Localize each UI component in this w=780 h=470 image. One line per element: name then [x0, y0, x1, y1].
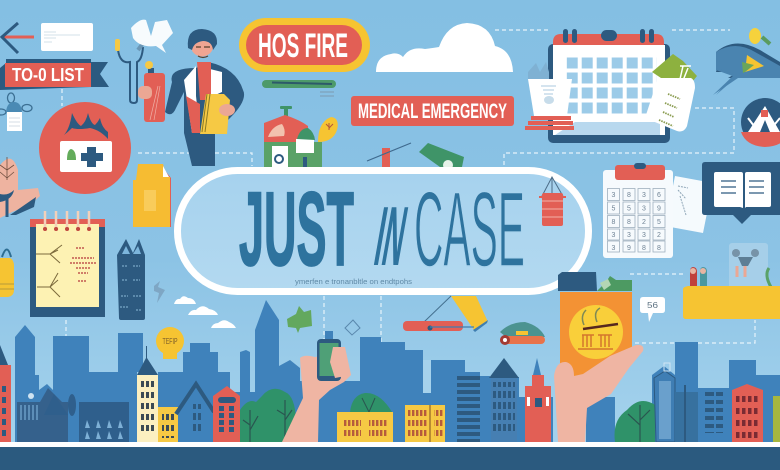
yellow low building with tree	[337, 393, 393, 442]
small calendar clipboard: 8	[612, 219, 616, 226]
icon: yellow bulb: TEFIP	[162, 337, 178, 346]
main title pill: IN	[369, 189, 413, 283]
dashed connector lines	[62, 30, 755, 412]
green cart	[419, 143, 464, 170]
orange card with hand	[554, 272, 643, 442]
icon: red lantern	[539, 177, 566, 226]
note card	[41, 23, 93, 51]
ticket tag	[645, 54, 697, 131]
small calendar clipboard: 3	[642, 192, 646, 199]
book speech bubble	[702, 162, 780, 224]
badge: hos fire	[239, 18, 370, 72]
notepad with sketch	[30, 211, 105, 317]
icon: fire medical circle	[39, 102, 131, 194]
olive building	[773, 396, 780, 442]
small calendar clipboard: 9	[657, 206, 661, 212]
plant pot	[525, 62, 574, 130]
red house	[213, 386, 240, 442]
cityscape skyline	[0, 300, 780, 442]
icon: house	[264, 106, 338, 167]
small calendar clipboard: 2	[642, 219, 646, 226]
small calendar clipboard: 5	[627, 206, 631, 212]
small calendar clipboard: 5	[612, 206, 616, 212]
person with folder	[165, 29, 244, 166]
red post and line	[367, 143, 411, 168]
small calendar clipboard: 8	[627, 192, 631, 199]
back buildings	[15, 300, 780, 442]
small calendar clipboard: 3	[612, 245, 616, 252]
cream tower	[137, 346, 158, 442]
banner: to-do list	[0, 59, 109, 90]
dark striped tower	[457, 375, 480, 442]
striped office right	[698, 388, 731, 442]
small calendar clipboard: 3	[612, 232, 616, 239]
bird icon	[713, 28, 780, 95]
yellow shelf with figures	[683, 243, 780, 319]
small calendar clipboard: 6	[657, 192, 661, 199]
small calendar clipboard: 9	[627, 245, 631, 252]
small calendar clipboard: 3	[642, 232, 646, 239]
antenna shape	[345, 320, 360, 335]
arrow top left	[2, 23, 34, 53]
striped tower right	[654, 363, 675, 442]
navy roof tower	[489, 358, 519, 442]
small calendar clipboard: 3	[627, 232, 631, 239]
label: medical emergency: MEDICAL EMERGENCY	[358, 100, 507, 123]
small calendar clipboard	[603, 163, 673, 258]
main title pill	[178, 169, 588, 292]
dark low buildings	[17, 388, 129, 442]
red clock tower	[525, 358, 551, 442]
dark tower	[117, 239, 145, 320]
tree right	[614, 401, 655, 442]
icon: yellow bulb	[156, 327, 184, 359]
lightning bolt	[154, 281, 165, 303]
white shield icon	[131, 20, 173, 53]
yellow office block	[405, 405, 445, 442]
icon circle: figure	[741, 98, 780, 147]
icon: mask and clipboard	[0, 93, 32, 131]
icon: yellow cylinder	[0, 250, 14, 297]
small clouds	[174, 296, 236, 328]
green trees left	[240, 389, 296, 442]
main title pill: CASE	[414, 169, 525, 289]
paper behind calendar	[665, 176, 713, 233]
cloud	[376, 23, 513, 72]
small calendar clipboard: 8	[627, 219, 631, 226]
speech bubble 56	[640, 297, 665, 322]
icon: pink hand	[0, 157, 40, 218]
stethoscope	[115, 39, 144, 103]
main title pill: JUST	[239, 171, 354, 288]
small calendar clipboard: 3	[642, 206, 646, 212]
red office right	[732, 384, 763, 442]
small calendar clipboard: 2	[657, 232, 661, 239]
green leaf	[287, 306, 312, 333]
footer band	[0, 447, 780, 470]
icon: red extinguisher	[138, 61, 165, 122]
label: medical emergency	[351, 96, 514, 126]
hand holding phone	[282, 339, 351, 442]
crane object	[403, 296, 488, 332]
small calendar clipboard: 5	[657, 219, 661, 226]
calendar large	[548, 29, 670, 143]
small calendar clipboard: 8	[657, 245, 661, 252]
lamp building	[675, 385, 698, 442]
green bar	[262, 80, 336, 96]
hand holding card	[554, 345, 643, 442]
badge: hos fire: HOS FIRE	[258, 27, 348, 65]
banner: to-do list: TO-0 LIST	[12, 65, 84, 85]
small vehicle	[500, 322, 545, 345]
blue house	[176, 384, 214, 442]
ground stripe	[0, 442, 780, 447]
red building left	[0, 345, 11, 442]
small calendar clipboard: 8	[642, 245, 646, 252]
subtitle: ymerfen e tronanbltle on endtpohs	[295, 277, 412, 286]
speech bubble 56: 56	[647, 301, 659, 310]
icon: yellow document	[133, 164, 171, 227]
yellow building	[158, 407, 178, 442]
small calendar clipboard: 3	[612, 192, 616, 199]
